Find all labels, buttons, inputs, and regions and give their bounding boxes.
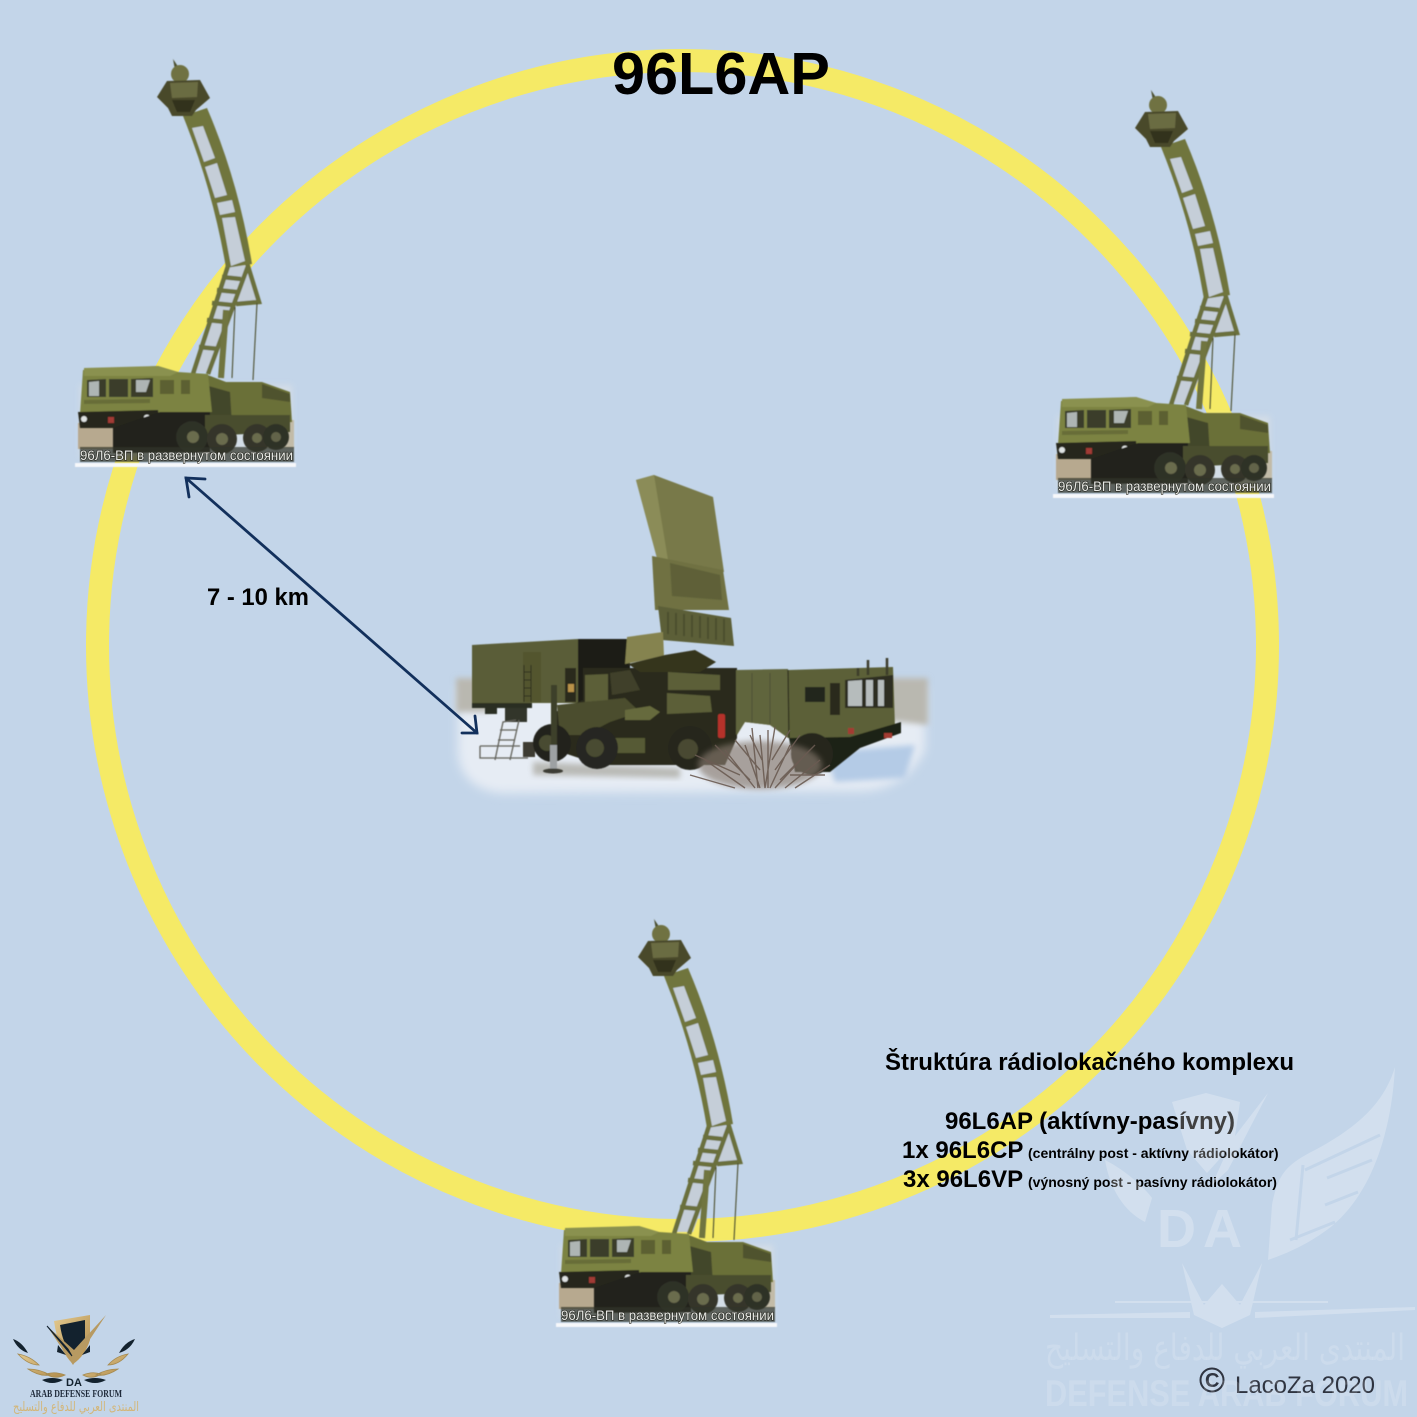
logo: Arab Defense Forum [13,1315,139,1415]
yellow radar ring [98,60,1268,1230]
legend: 96L6VP: 3x 96L6VP [903,1166,1029,1193]
radar antenna panels [636,475,724,572]
arrow: distance between posts [186,478,477,733]
distance label: 7 - 10 km [207,584,309,611]
title: 96L6AP [612,40,830,107]
watermark: Defense Arab Forum [1045,1067,1415,1414]
front bumper [789,722,901,772]
caption: top left vehicle: 96Л6-ВП в развернутом состоянии [80,447,293,463]
copyright: C [1205,1370,1219,1392]
vehicle: 96L6-VP top right [1053,90,1274,498]
fire extinguisher [718,714,725,738]
logo letters: DA [66,1377,82,1389]
logo wings [18,1354,65,1377]
chassis body [555,668,737,765]
equipment shelter [472,639,578,703]
dry bush [690,727,830,789]
copyright: LacoZa 2020 [1235,1372,1375,1399]
vehicle: 96L6-VP top left [75,59,296,467]
logo shield [54,1315,90,1364]
watermark shield [1172,1093,1240,1173]
legend: radar complex structure [885,1048,1294,1193]
watermark right wing [1268,1067,1395,1260]
watermark jet [1182,1263,1262,1328]
logo arabic name: المنتدى العربي للدفاع والتسليح [13,1400,139,1415]
snowy ground [458,685,925,793]
radar mount [625,632,664,664]
vehicle: 96L6-VP bottom [556,919,777,1327]
wheels [533,724,571,762]
logo check mark [47,1315,106,1365]
logo name: ARAB DEFENSE FORUM [30,1389,122,1400]
stairs [480,720,528,760]
cab section [737,667,895,738]
legend: 96L6VP: (výnosný post - pasívny rádiolokátor) [1028,1174,1277,1190]
vehicle: 96L6-CP centre radar [456,475,928,793]
caption: bottom vehicle: 96Л6-ВП в развернутом состоянии [561,1307,774,1323]
legend: 96L6CP: (centrálny post - aktívny rádiolokátor) [1028,1145,1278,1161]
caption: top right vehicle: 96Л6-ВП в развернутом состоянии [1058,478,1271,494]
watermark left wing [1105,1160,1152,1222]
legend heading: Štruktúra rádiolokačného komplexu [885,1048,1294,1076]
watermark letters: DA [1157,1199,1242,1259]
legend: 96L6CP: 1x 96L6CP [902,1137,1030,1164]
jack post [551,685,557,745]
legend: 96L6AP: 96L6AP (aktívny-pasívny) [945,1108,1235,1135]
